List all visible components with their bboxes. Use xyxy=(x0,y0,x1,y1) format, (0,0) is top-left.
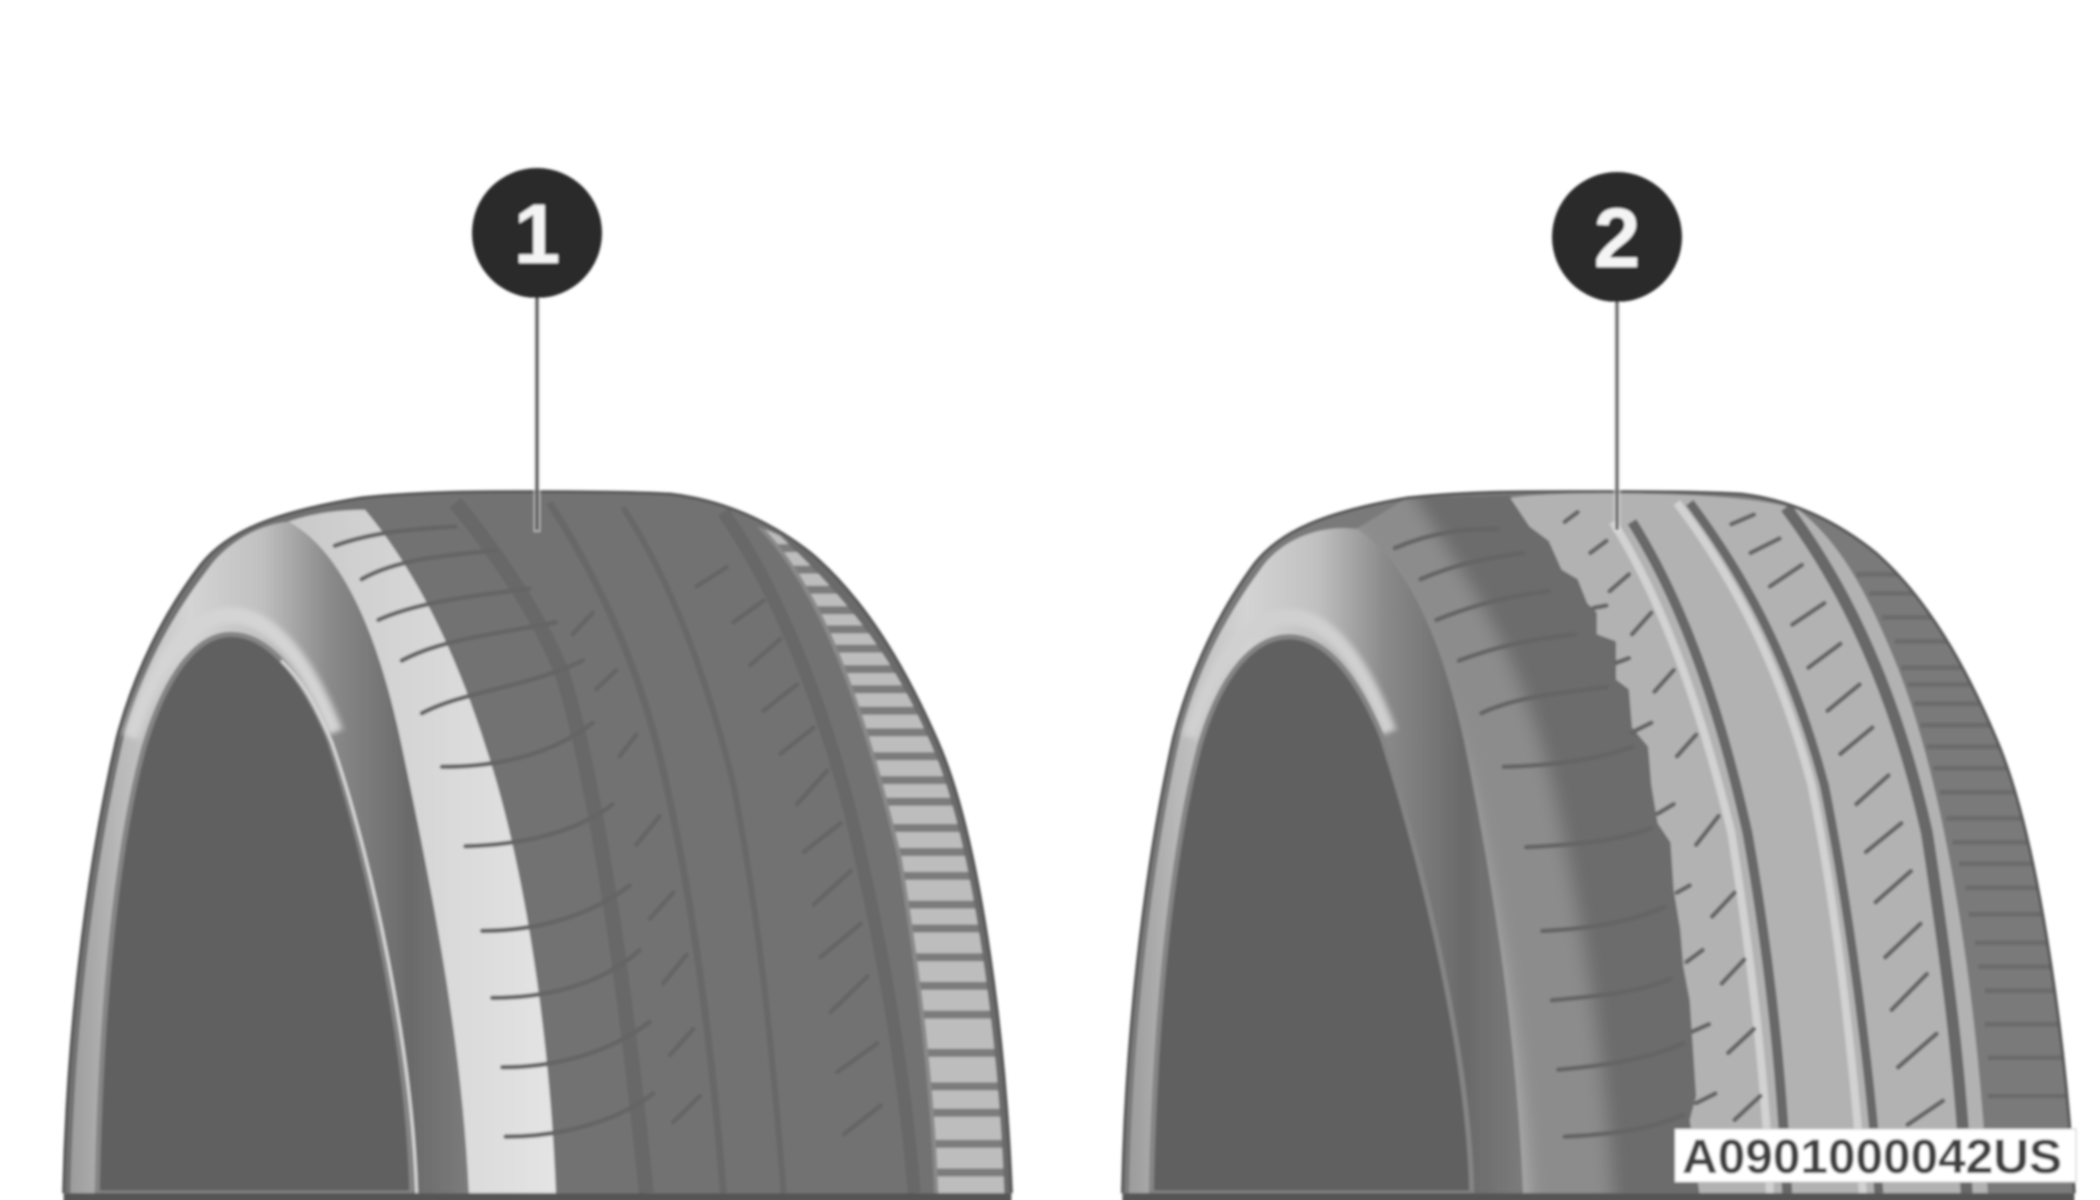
tire 1 bead arc xyxy=(131,615,335,737)
badge number 2: 2 xyxy=(1594,191,1640,285)
tire 1 ground band xyxy=(64,1193,1011,1200)
tire 1 rim highlight xyxy=(281,661,417,1193)
callout 1 xyxy=(472,168,602,532)
tire 2 worn light tread xyxy=(1510,493,1988,1193)
tire 2 silhouette xyxy=(1122,492,2074,1193)
tire 2 tread highlights xyxy=(1613,503,1863,1193)
tire 1 wheel opening xyxy=(97,634,412,1193)
tire 1 sidewall marks xyxy=(335,527,653,1137)
tire 1 tread sipes xyxy=(573,567,881,1134)
tire 2 shaded sidewall band xyxy=(1358,496,1698,1194)
tire 2 bead arc xyxy=(1190,617,1388,737)
callout 2 xyxy=(1552,172,1682,532)
tire 1 outline xyxy=(64,492,1011,1193)
figure code label: A0901000042US xyxy=(1682,1131,2062,1184)
leader line 2 xyxy=(1614,290,1620,532)
tire 2 outline xyxy=(1122,492,2074,1193)
leader line 1 xyxy=(534,290,540,532)
tire 1 silhouette xyxy=(64,492,1011,1193)
tire 2: tread wear indicator xyxy=(1122,431,2074,1200)
tire 1 light sidewall band xyxy=(288,510,556,1193)
tire 1 sidewall xyxy=(70,522,469,1193)
tire 2 tread grooves xyxy=(1632,503,1967,1193)
badge 1 xyxy=(472,168,602,298)
tire 2 tread sipes xyxy=(1565,512,1943,1125)
tire 2 ground band xyxy=(1122,1193,2074,1200)
tire 1 shoulder blocks xyxy=(758,527,1006,1195)
tire 2 sidewall marks xyxy=(1395,529,1683,1137)
tire 2 shoulder ribs xyxy=(1856,574,2068,1096)
tire 1: worn tread xyxy=(64,492,1018,1200)
tire 1 tread grooves xyxy=(455,503,914,1193)
badge number 1: 1 xyxy=(514,187,560,281)
tire 2 sidewall xyxy=(1129,528,1523,1193)
badge 2 xyxy=(1552,172,1682,302)
tire 2 wheel opening xyxy=(1151,637,1472,1193)
